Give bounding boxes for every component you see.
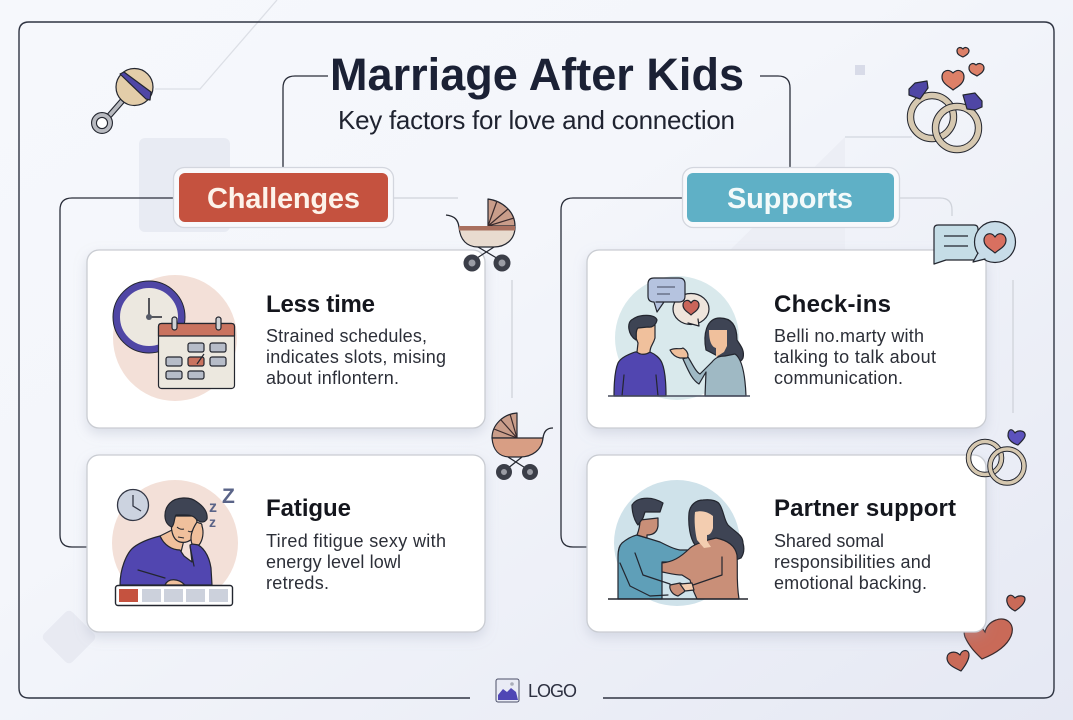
heading pill: Challenges: Challenges (207, 183, 360, 215)
text: Partner support: Shared somal (774, 531, 884, 551)
text: Check-ins: communication. (774, 368, 903, 388)
text: Check-ins: talking to talk about (774, 347, 936, 367)
heading pill: Supports: Supports (727, 183, 853, 215)
icon: tired person (112, 480, 238, 606)
icon: baby rattle (94, 68, 153, 131)
title: Marriage After Kids (330, 49, 744, 100)
text: Fatigue (266, 495, 446, 593)
text: Fatigue: retreds. (266, 573, 329, 593)
subtitle: Key factors for love and connection (338, 105, 735, 135)
icon: small hearts (947, 595, 1025, 671)
icon: chat bubbles with heart (934, 222, 1016, 264)
text: Fatigue: Tired fitigue sexy with (266, 531, 446, 551)
text: Check-ins (774, 291, 936, 388)
text: Less time: indicates slots, mising (266, 347, 446, 367)
text: Check-ins: Check-ins (774, 291, 891, 318)
logo: LOGO (528, 681, 577, 701)
icon: two people talking (608, 276, 750, 400)
text: Check-ins: Belli no.marty with (774, 326, 924, 346)
text: Less time: Strained schedules, (266, 326, 427, 346)
text: Partner support: emotional backing. (774, 573, 927, 593)
icon: couple holding hands (608, 480, 748, 606)
icon: wedding rings with hearts (909, 48, 984, 150)
panel: Fatigue (87, 455, 485, 632)
text: Fatigue: Fatigue (266, 495, 351, 522)
icon: linked rings with heart (968, 430, 1025, 483)
icon: baby pram, lower (492, 413, 553, 478)
text: Less time: about inflontern. (266, 368, 399, 388)
logo (496, 679, 577, 702)
text: Partner support: Partner support (774, 495, 956, 522)
icon: baby pram, upper (446, 199, 515, 269)
large heart behind card (964, 619, 1012, 659)
text: Fatigue: energy level lowl (266, 552, 401, 572)
icon: tired person: Z (222, 485, 235, 508)
panel: Check-ins (587, 250, 986, 428)
text: Less time: Less time (266, 291, 375, 318)
text: Partner support: responsibilities and (774, 552, 931, 572)
heading pill: Challenges (174, 168, 394, 228)
icon: tired person: z (209, 499, 217, 516)
icon: clock and calendar (113, 275, 237, 401)
heading pill: Supports (682, 168, 900, 228)
panel: Less time (87, 250, 485, 428)
text: Less time (266, 291, 446, 388)
icon: tired person: z (209, 514, 216, 530)
text: Partner support (774, 495, 956, 593)
panel: Partner support (587, 455, 986, 632)
connector lines (60, 76, 790, 547)
